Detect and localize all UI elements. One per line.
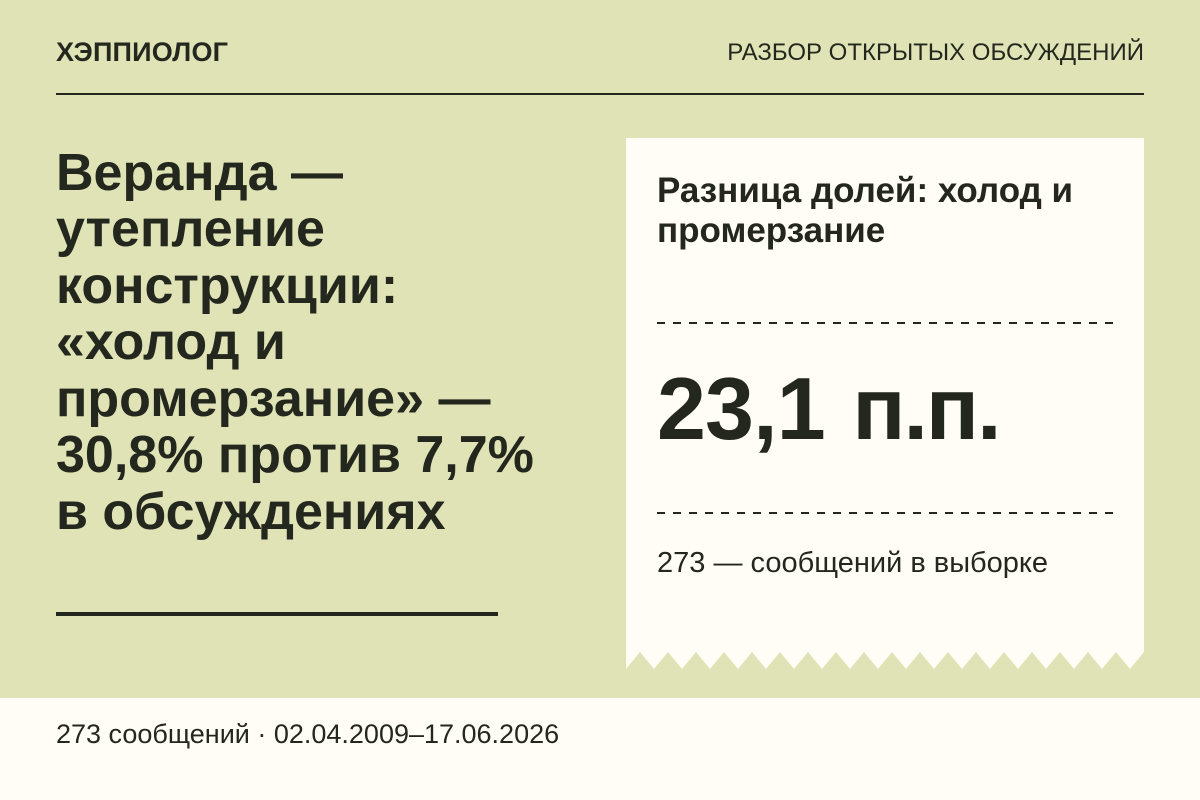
headline <box>56 144 534 540</box>
panel: receipt card <box>626 138 1144 669</box>
dashed divider bottom <box>657 512 1113 514</box>
key figure: 23,1 п.п. <box>657 359 1000 458</box>
header label: РАЗБОР ОТКРЫТЫХ ОБСУЖДЕНИЙ <box>727 39 1144 66</box>
card heading: Разница долей: холод и <box>657 171 1073 210</box>
card heading <box>657 171 1073 250</box>
card heading: промерзание <box>657 211 885 250</box>
header rule <box>56 93 1144 95</box>
headline: промерзание» — <box>56 370 490 428</box>
headline: в обсуждениях <box>56 482 446 540</box>
brand name: ХЭППИОЛОГ <box>56 37 228 67</box>
dashed divider top <box>657 322 1113 324</box>
card background with zigzag edge <box>626 138 1144 669</box>
footer band <box>0 698 1200 800</box>
headline: утепление <box>56 200 325 258</box>
sample note: 273 — сообщений в выборке <box>657 547 1048 579</box>
accent rule <box>56 612 498 616</box>
headline: конструкции: <box>56 256 398 314</box>
headline: 30,8% против 7,7% <box>56 426 534 484</box>
footer text: 273 сообщений · 02.04.2009–17.06.2026 <box>56 719 559 749</box>
headline: «холод и <box>56 313 286 371</box>
headline: Веранда — <box>56 144 343 202</box>
